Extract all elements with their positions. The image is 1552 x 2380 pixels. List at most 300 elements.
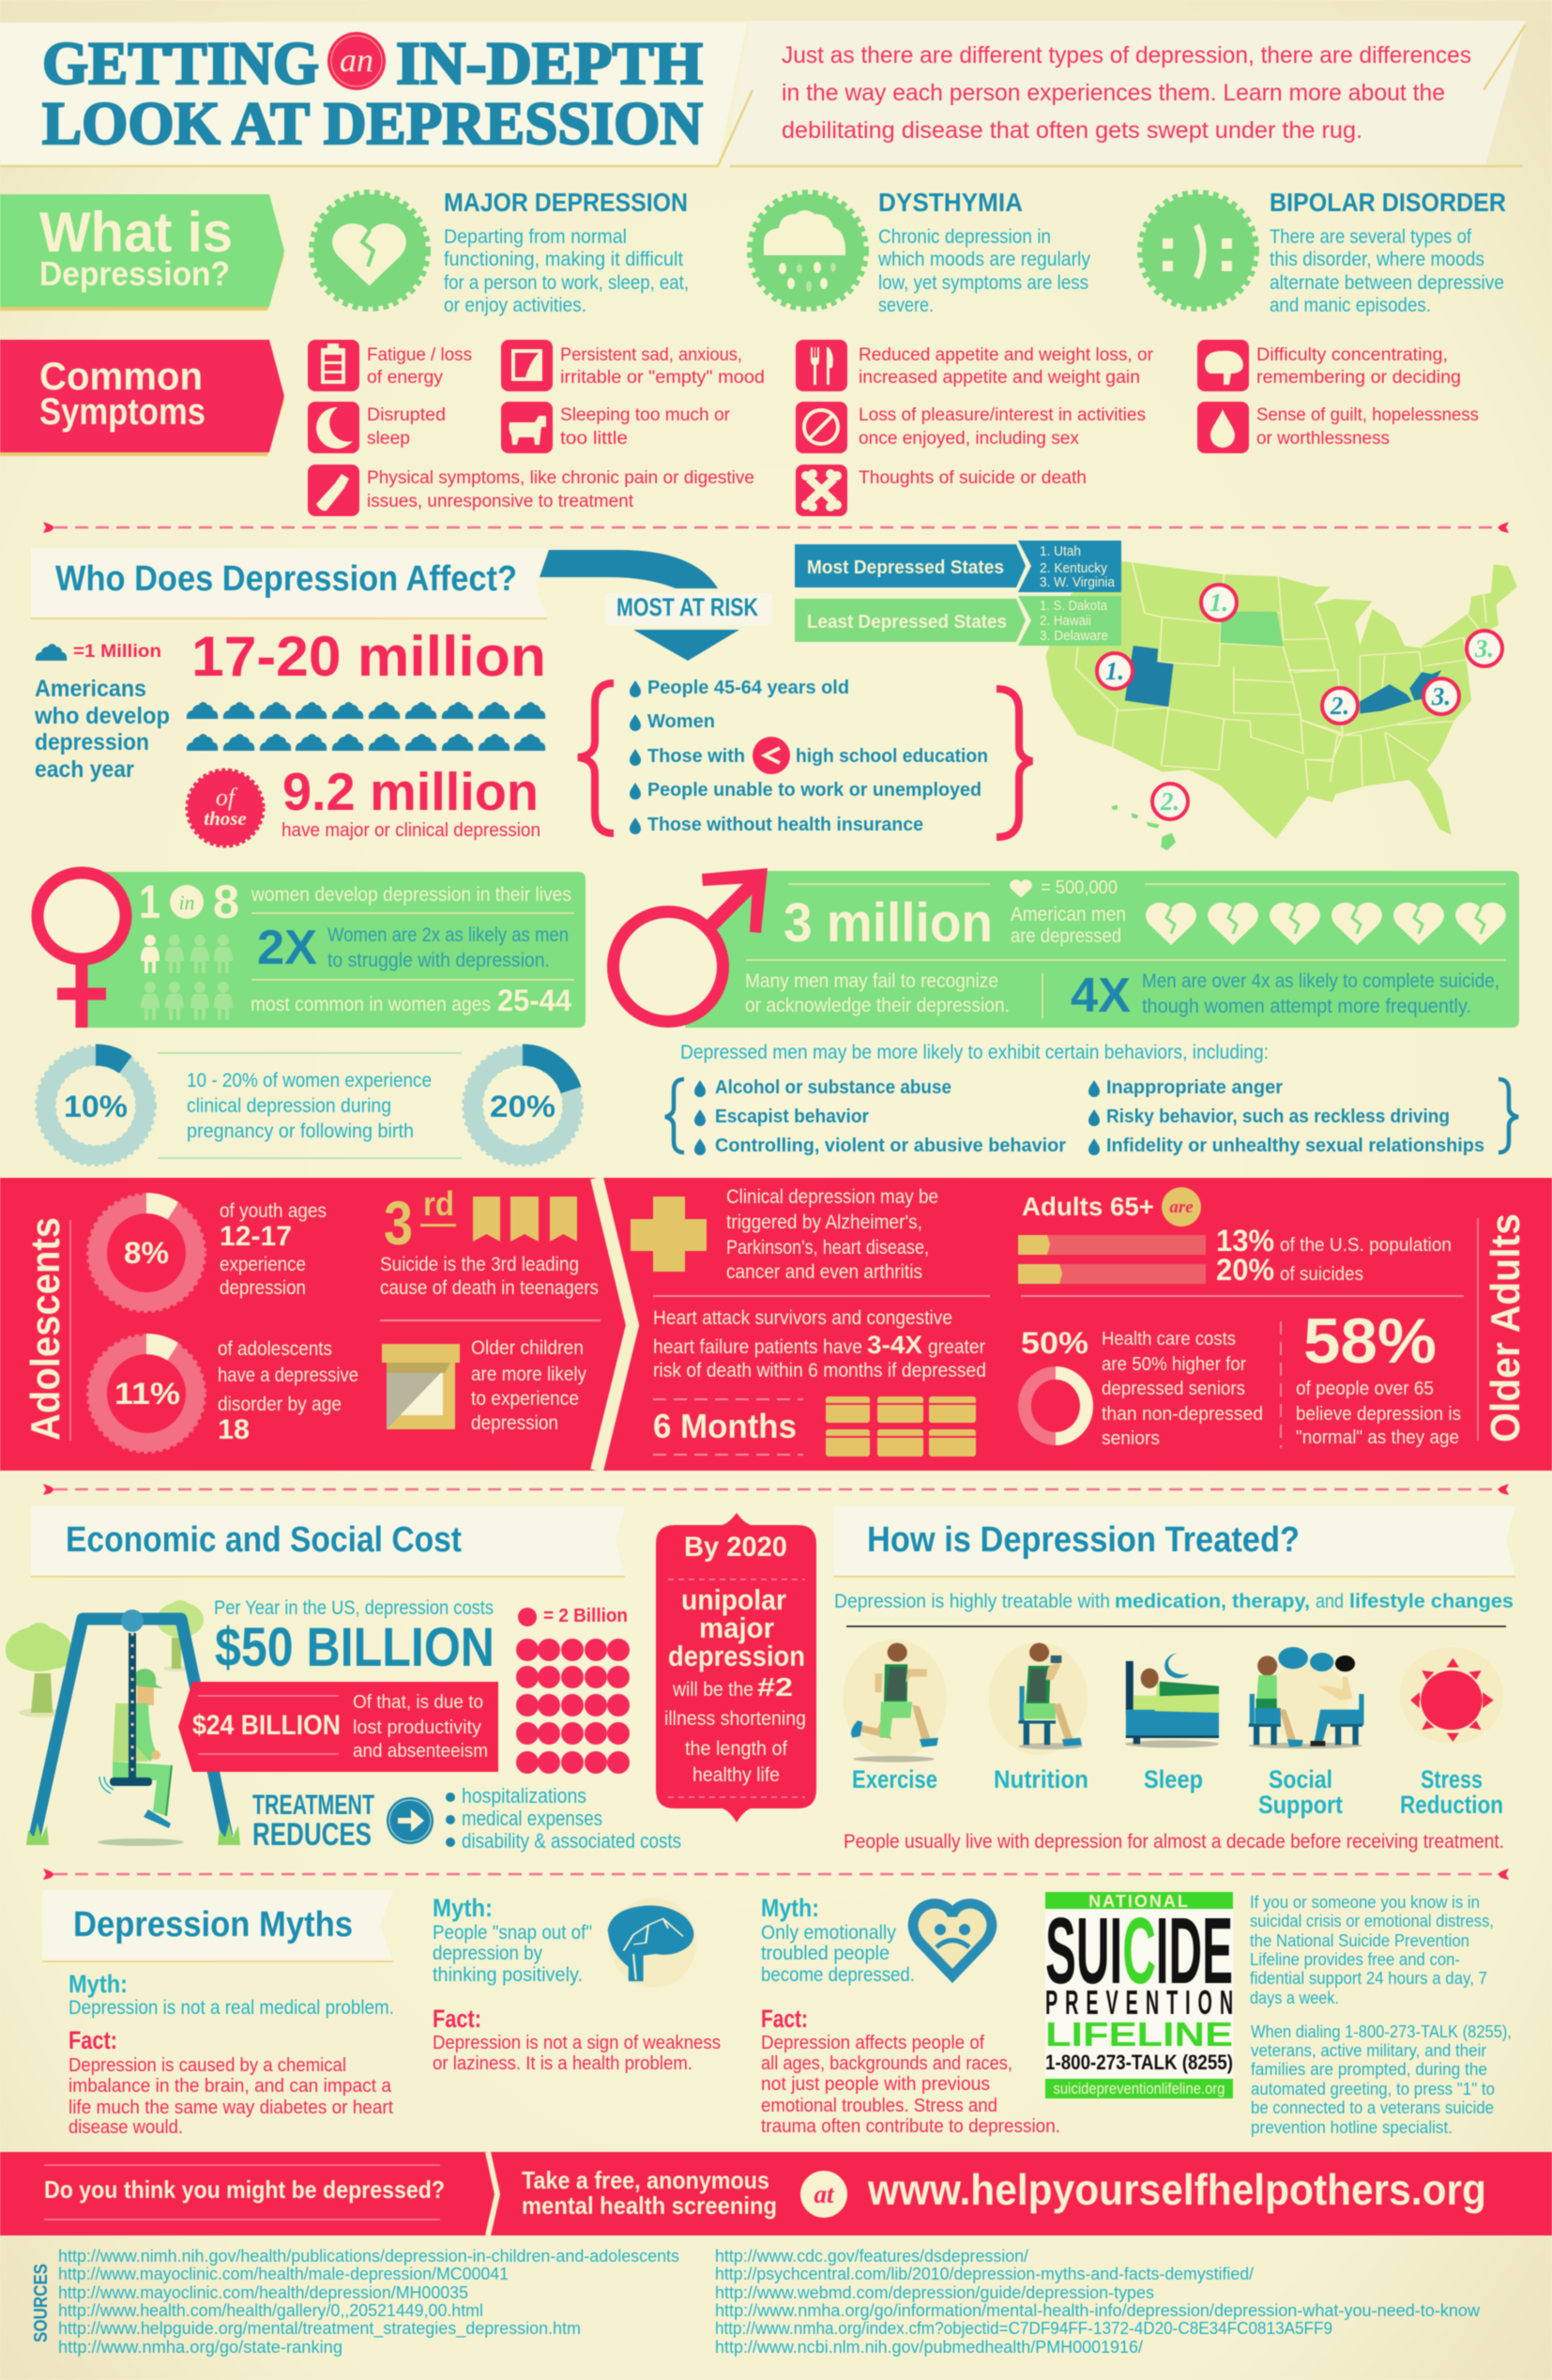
myth three (761, 1894, 1060, 2137)
intro text (782, 42, 1471, 144)
americans label: Americans (35, 676, 146, 702)
text: clinical triggers: Clinical depression may be (726, 1186, 938, 1208)
lifeline text: be connected to a veterans suicide (1251, 2098, 1494, 2117)
title: IN-DEPTH (396, 30, 703, 98)
map marker: west virginia: 3. (1431, 682, 1451, 710)
screening text: mental health screening (522, 2191, 777, 2220)
treatment labels: Support (1258, 1791, 1343, 1819)
text: suicide 3rd leading: Suicide is the 3rd leading (380, 1254, 579, 1275)
text: youth ages: 12-17 (220, 1221, 292, 1252)
badge: at (800, 2171, 847, 2218)
arrow: most at risk: MOST AT RISK (616, 593, 758, 621)
logo: national suicide prevention lifeline: NATIONAL (1088, 1892, 1190, 1911)
symptom: mood (560, 345, 765, 388)
label: most depressed states: 3. W. Virginia (1040, 574, 1116, 590)
treatment labels: Exercise (852, 1765, 937, 1793)
statistic: 3 million: 3 million (784, 892, 993, 954)
text: men fail to recognize: or acknowledge their depression. (745, 995, 1010, 1016)
title: LOOK AT DEPRESSION (42, 90, 703, 158)
panel: who does depression affect (31, 548, 1032, 847)
list: treatment reduces: medical expenses (462, 1807, 602, 1830)
behaviours list: Infidelity or unhealthy sexual relationships (1106, 1136, 1484, 1156)
text: clinical triggers: Parkinson's, heart disease, (726, 1237, 929, 1259)
number: 9.2 million: have major or clinical depression (281, 820, 540, 841)
stat: 58 percent: "normal" as they age (1296, 1427, 1459, 1448)
myth one: life much the same way diabetes or heart (68, 2098, 393, 2118)
text: heart attack survivors: 3-4X (867, 1331, 922, 1359)
statistic: 1 in 8: 1 (139, 876, 160, 928)
panel: how is depression treated (833, 1506, 1515, 1853)
label: most depressed states (795, 541, 1121, 592)
text: heart attack survivors (653, 1307, 986, 1381)
heading: adults 65+ (1022, 1187, 1201, 1227)
symptom: sleeping too much: Sleeping too much or (560, 405, 731, 425)
treatment intro: and (1316, 1591, 1344, 1612)
text: women stats: women develop depression in their lives (251, 884, 571, 906)
text: adolescents disorder: of adolescents (218, 1338, 332, 1360)
illustration: person on swing (6, 1600, 240, 1846)
myth three: not just people with previous (761, 2074, 990, 2095)
stat: 58 percent (1296, 1305, 1461, 1448)
symptom: sleeping too much (560, 405, 731, 449)
sources column two: http://www.nmha.org/go/information/mental-health-info/depression/depression-what-you-need-to-know (715, 2301, 1481, 2320)
symptom: concentration (1256, 345, 1461, 388)
text: youth ages: experience (220, 1254, 306, 1275)
sources column one: http://www.mayoclinic.com/health/male-depression/MC00041 (58, 2265, 509, 2283)
icon: male symbol (614, 868, 768, 1021)
panel: women (38, 872, 586, 1028)
symptom: mood: Persistent sad, anxious, (560, 345, 742, 365)
callout: by 2020: illness shortening (664, 1708, 806, 1730)
text: clinical triggers: cancer and even arthritis (726, 1261, 922, 1283)
legend: heart equals 500,000: are depressed (1011, 925, 1121, 947)
lifeline text: suicidal crisis or emotional distress, (1250, 1912, 1494, 1930)
myth three: Myth: (761, 1894, 819, 1922)
badge: at: at (814, 2180, 835, 2208)
risk list: Women (647, 711, 715, 732)
myth two (433, 1894, 721, 2074)
icon: pill bottle (382, 1344, 460, 1429)
callout: by 2020: depression (668, 1640, 805, 1672)
major depression text: or enjoy activities. (444, 295, 586, 316)
text: pregnancy statistic: pregnancy or following birth (187, 1121, 414, 1142)
icon: exercise (843, 1640, 947, 1762)
banner: common symptoms: Common (39, 354, 203, 398)
major depression text: for a person to work, sleep, eat, (444, 272, 689, 294)
myth two: or laziness. It is a health problem. (433, 2053, 692, 2074)
adolescents label: Adolescents (23, 1217, 68, 1441)
legend: heart equals 500,000: = 500,000 (1041, 877, 1118, 898)
symptom: guilt: Sense of guilt, hopelessness (1256, 405, 1479, 425)
icon: battery (308, 340, 359, 391)
myth two: Depression is not a sign of weakness (433, 2033, 721, 2053)
icon: drop (1197, 402, 1249, 453)
text: health care costs (1102, 1329, 1263, 1449)
call to action band (0, 2152, 1552, 2235)
text: clinical triggers (726, 1186, 938, 1283)
dysthymia text: DYSTHYMIA (878, 188, 1023, 217)
symptom: thoughts of suicide: Thoughts of suicide or death (859, 468, 1087, 488)
treatment labels: Nutrition (994, 1765, 1088, 1793)
screening text: Take a free, anonymous (522, 2166, 769, 2194)
text: women stats: 25-44 (497, 984, 571, 1017)
callout: by 2020: the length of (685, 1738, 787, 1760)
text: $50 billion: $50 BILLION (215, 1617, 495, 1678)
lifeline text: Lifeline provides free and con- (1250, 1950, 1460, 1969)
risk list: People unable to work or unemployed (647, 780, 981, 801)
major depression text: functioning, making it difficult (444, 249, 683, 270)
statistic: 1 in 8: 8 (213, 876, 239, 928)
sources column two: http://psychcentral.com/lib/2010/depression-myths-and-facts-demystified/ (715, 2265, 1254, 2283)
heading ribbon (42, 1890, 393, 1961)
treatment labels: Stress (1421, 1765, 1483, 1793)
text: older children: Older children (471, 1337, 584, 1359)
callout: $24 billion: $24 BILLION (192, 1710, 341, 1741)
label: least depressed states: 2. Hawaii (1040, 613, 1091, 629)
text: heart attack survivors: risk of death within 6 months if depressed (653, 1360, 986, 1381)
label: least depressed states: Least Depressed States (807, 612, 1007, 633)
text: older children: to experience (471, 1388, 579, 1410)
myth two: depression by (433, 1943, 542, 1964)
statistic: 1 in 8: in (178, 891, 195, 914)
myth two: People "snap out of" (433, 1922, 592, 1944)
panel: common symptoms (0, 340, 1479, 516)
heading ribbon (31, 548, 547, 618)
callout: $24 billion: lost productivity (353, 1717, 481, 1738)
header band with title and intro (0, 21, 1526, 166)
banner: what is depression: Depression? (39, 254, 230, 293)
heading: adults 65+: Adults 65+ (1022, 1192, 1154, 1221)
americans label (34, 676, 170, 783)
stat: 58 percent: of people over 65 (1296, 1379, 1434, 1399)
myth three: Depression affects people of (761, 2033, 984, 2053)
legend: cloud equals one million: =1 Million (73, 642, 161, 662)
callout: by 2020: #2 (757, 1672, 793, 1701)
pictogram: dollar dots (516, 1639, 630, 1774)
legend: heart equals 500,000: American men (1011, 904, 1126, 925)
icon: stress reduction sun (1400, 1647, 1503, 1744)
symptom: concentration: remembering or deciding (1256, 368, 1461, 388)
statistic: 4x (1071, 969, 1499, 1023)
label: most depressed states: Most Depressed States (807, 557, 1004, 578)
panel: men (614, 868, 1519, 1028)
screening text (522, 2166, 777, 2220)
behaviours list: Escapist behavior (715, 1106, 869, 1127)
logo: national suicide prevention lifeline: suicidepreventionlifeline.org (1053, 2080, 1225, 2098)
brace right (997, 689, 1032, 837)
symptom: loss of pleasure (859, 405, 1146, 449)
icon: picture frame (501, 340, 553, 391)
stat: 3rd: rd (423, 1184, 454, 1223)
icon: brain (608, 1898, 697, 1988)
symptom: appetite: Reduced appetite and weight loss, or (859, 345, 1154, 365)
older adults label: Older Adults (1483, 1213, 1529, 1442)
myth one: Depression is not a real medical problem. (68, 1997, 394, 2019)
text: health care costs: Health care costs (1102, 1329, 1236, 1350)
text: pregnancy statistic: clinical depression during (187, 1095, 391, 1117)
logo: national suicide prevention lifeline: PREVENTION (1045, 1985, 1233, 2022)
text: adolescents disorder: disorder by age (218, 1394, 342, 1415)
icon: bookmarks (473, 1197, 577, 1242)
brace left teal (665, 1079, 684, 1152)
sources column one: http://www.nmha.org/go/state-ranking (58, 2338, 342, 2357)
myth three: emotional troubles. Stress and (761, 2096, 997, 2116)
behaviours list (694, 1077, 1484, 1156)
text: youth ages (220, 1200, 327, 1299)
text: men fail to recognize (745, 970, 1010, 1016)
icon: arrow circle (387, 1797, 434, 1844)
lifeline text: the National Suicide Prevention (1250, 1931, 1469, 1950)
americans label: each year (35, 756, 134, 783)
statistic: 1 in 8 (139, 876, 239, 928)
sources column two: http://www.cdc.gov/features/dsdepression/ (715, 2247, 1028, 2266)
text: suicide 3rd leading (380, 1254, 599, 1299)
stat: 58 percent: 58% (1303, 1305, 1437, 1377)
ring: 20 percent: 20% (490, 1090, 555, 1123)
legend: cloud equals one million (36, 642, 161, 662)
text: women stats: to struggle with depression. (327, 950, 550, 971)
symptom: concentration: Difficulty concentrating, (1256, 345, 1448, 365)
panel: what is depression (0, 188, 1506, 316)
statistic: 4x: though women attempt more frequently. (1142, 996, 1471, 1017)
banner: common symptoms: Symptoms (39, 391, 205, 433)
symptom: guilt (1256, 405, 1479, 449)
bar chart: adults 65+: of suicides (1280, 1264, 1363, 1285)
panel: adolescents and older adults band (0, 1178, 1552, 1471)
symptom: physical: issues, unresponsive to treatment (367, 492, 634, 511)
logo: national suicide prevention lifeline: 1-800-273-TALK (8255) (1045, 2051, 1233, 2074)
text: women stats (251, 884, 574, 1017)
sources column one: http://www.helpguide.org/mental/treatment_strategies_depression.htm (58, 2319, 581, 2339)
lifeline text: fidential support 24 hours a day, 7 (1250, 1969, 1487, 1988)
symptom: physical: Physical symptoms, like chronic pain or digestive (367, 468, 754, 488)
symptom: guilt: or worthlessness (1256, 429, 1390, 449)
myth two: thinking positively. (433, 1964, 583, 1986)
callout: $24 billion: Of that, is due to (353, 1692, 483, 1713)
text: youth ages: depression (220, 1277, 306, 1299)
text: heart attack survivors: greater (928, 1336, 985, 1358)
ring: 8 percent (88, 1195, 205, 1311)
major depression text: Departing from normal (444, 226, 627, 248)
heading ribbon (833, 1506, 1515, 1577)
map marker: delaware (1467, 631, 1502, 666)
sources column two: http://www.ncbi.nlm.nih.gov/pubmedhealth/PMH0001916/ (715, 2338, 1143, 2357)
text: $50 billion (214, 1597, 495, 1678)
dysthymia text: Chronic depression in (878, 226, 1051, 248)
bipolar disorder text: this disorder, where moods (1270, 249, 1484, 270)
pictogram: women (141, 935, 233, 1020)
risk list: People 45-64 years old (647, 678, 849, 698)
label: least depressed states: 1. S. Dakota (1040, 598, 1108, 614)
risk list: Those without health insurance (647, 815, 923, 835)
text: adolescents disorder: have a depressive (218, 1365, 358, 1386)
legend: heart equals 500,000 (1010, 877, 1126, 947)
symptom: mood: irritable or "empty" mood (560, 368, 765, 388)
ring: 20 percent (464, 1046, 582, 1165)
myth three: troubled people (761, 1943, 890, 1964)
callout: by 2020: By 2020 (684, 1532, 787, 1563)
dysthymia text: low, yet symptoms are less (878, 272, 1088, 294)
callout: by 2020 (656, 1513, 816, 1823)
map of the united states (1045, 561, 1517, 850)
behaviours list: Risky behavior, such as reckless driving (1106, 1106, 1450, 1127)
text: health care costs: than non-depressed (1102, 1404, 1263, 1425)
lifeline text: When dialing 1-800-273-TALK (8255), (1251, 2022, 1512, 2041)
text: treatment reduces: TREATMENT (252, 1790, 374, 1821)
major depression text: MAJOR DEPRESSION (444, 188, 688, 217)
text: health care costs: depressed seniors (1102, 1379, 1245, 1399)
dysthymia text (877, 188, 1090, 316)
stat: 3rd (384, 1184, 456, 1258)
bar chart: adults 65+ (1018, 1224, 1452, 1287)
text: women stats: Women are 2x as likely as men (327, 924, 569, 946)
heading ribbon: Who Does Depression Affect? (55, 559, 517, 599)
banner: what is depression: What is (39, 201, 233, 264)
panel: sources (31, 2247, 1481, 2357)
myth one: disease would. (68, 2117, 183, 2138)
bipolar disorder text: There are several types of (1270, 226, 1471, 248)
lifeline text (1250, 1893, 1512, 2137)
ring: 11 percent (88, 1335, 205, 1452)
title: GETTING (42, 30, 319, 98)
logo: national suicide prevention lifeline: SUICIDE (1045, 1899, 1233, 2004)
sources column one: http://www.health.com/health/gallery/0,,20521449,00.html (58, 2301, 483, 2320)
number: 9.2 million: 9.2 million (282, 762, 539, 822)
text: clinical triggers: triggered by Alzheimer's, (726, 1212, 922, 1233)
text: treatment reduces: REDUCES (252, 1817, 372, 1853)
behaviours list: Inappropriate anger (1106, 1077, 1283, 1098)
treatment labels: Reduction (1400, 1791, 1503, 1819)
callout: by 2020: major (699, 1611, 774, 1644)
badge: of those (187, 770, 264, 847)
heading ribbon: Depression Myths (73, 1905, 353, 1945)
brace right teal (1499, 1079, 1518, 1152)
myth one: Fact: (68, 2026, 117, 2054)
label: most depressed states: 2. Kentucky (1040, 560, 1107, 576)
map marker: hawaii: 2. (1160, 787, 1179, 816)
title badge: an (327, 32, 386, 90)
lifeline text: families are prompted, during the (1251, 2060, 1487, 2079)
panel: depression myths (42, 1890, 1060, 2138)
text: pregnancy statistic: 10 - 20% of women experience (187, 1070, 432, 1091)
text: treatment reduces (252, 1790, 374, 1853)
ring: 8 percent: 8% (124, 1236, 169, 1270)
banner: common symptoms (0, 340, 284, 456)
text: women stats: most common in women ages (251, 994, 491, 1015)
treatment note: People usually live with depression for almost a decade before receiving treatment. (844, 1831, 1504, 1853)
text: men fail to recognize: Many men may fail to recognize (745, 970, 998, 992)
banner: what is depression (0, 194, 284, 311)
donut chart: 50 percent: 50% (1021, 1326, 1088, 1360)
icon: social support (1249, 1647, 1364, 1748)
callout: by 2020: healthy life (692, 1764, 780, 1786)
text: older children: depression (471, 1412, 558, 1434)
heading ribbon: Economic and Social Cost (66, 1520, 462, 1560)
list: treatment reduces (446, 1784, 681, 1853)
myth two: Fact: (433, 2005, 481, 2033)
icon: crossbones (796, 465, 847, 516)
icon: sheep (501, 402, 553, 453)
lifeline text: automated greeting, to press "1" to (1251, 2080, 1495, 2098)
symptom: appetite: increased appetite and weight gain (859, 368, 1140, 388)
badge: of those: of (216, 784, 238, 811)
risk list (630, 678, 988, 835)
text: $50 billion: Per Year in the US, depression costs (214, 1597, 494, 1619)
ring: 11 percent: 11% (114, 1377, 180, 1411)
myth three: Only emotionally (761, 1922, 896, 1944)
label: most depressed states: 1. Utah (1040, 543, 1081, 559)
map marker: south dakota: 1. (1210, 588, 1228, 617)
title badge: an: an (340, 41, 373, 79)
icon: sleep (1125, 1654, 1219, 1747)
sources column two: http://www.webmd.com/depression/guide/depression-types (715, 2283, 1154, 2302)
text: youth ages: of youth ages (220, 1200, 327, 1222)
treatment labels: Social (1269, 1765, 1332, 1793)
icon: medical cross (631, 1197, 707, 1272)
map marker: hawaii (1152, 784, 1188, 819)
americans label: who develop (34, 703, 170, 729)
treatment labels: Sleep (1144, 1765, 1203, 1793)
map marker: kentucky: 2. (1330, 692, 1349, 720)
myth two: Myth: (433, 1894, 493, 1922)
bar chart: adults 65+: 20% (1216, 1253, 1274, 1287)
intro text: debilitating disease that often gets swept under the rug. (782, 117, 1362, 144)
treatment intro: lifestyle changes (1349, 1591, 1514, 1612)
text: heart attack survivors: heart failure patients have (653, 1336, 862, 1358)
icon: fork and knife (796, 340, 847, 391)
map marker: delaware: 3. (1474, 634, 1494, 663)
myth three: trauma often contribute to depression. (761, 2116, 1060, 2137)
ring: 10 percent (37, 1046, 155, 1165)
panel: pregnancy rings (37, 1046, 582, 1165)
lifeline text: prevention hotline specialist. (1251, 2118, 1453, 2137)
map marker: kentucky (1322, 688, 1358, 724)
risk list: Those with (647, 746, 745, 767)
americans label: depression (35, 729, 149, 755)
text: older children (471, 1337, 586, 1434)
symptom: sleep: sleep (367, 429, 410, 449)
symptom: sleep (367, 405, 446, 449)
heading ribbon (31, 1506, 625, 1577)
brace left (578, 683, 614, 833)
text: health care costs: are 50% higher for (1102, 1354, 1246, 1375)
map marker: utah (1097, 653, 1133, 689)
treatment intro: therapy, (1232, 1591, 1310, 1612)
text: suicide 3rd leading: cause of death in teenagers (380, 1277, 599, 1299)
behaviours list: Controlling, violent or abusive behavior (715, 1136, 1066, 1156)
callout: by 2020: unipolar (681, 1583, 786, 1616)
myth three: Fact: (761, 2005, 808, 2033)
myth one (68, 1970, 394, 2138)
sources column one: http://www.nimh.nih.gov/health/publications/depression-in-children-and-adolescents (58, 2247, 679, 2266)
badge: of those: those (204, 807, 247, 830)
legend: dot equals 2 billion: = 2 Billion (543, 1606, 628, 1626)
myth one: imbalance in the brain, and can impact a (68, 2076, 392, 2097)
website: www.helpyourselfhelpothers.org (867, 2165, 1486, 2214)
myth three: become depressed. (761, 1964, 915, 1986)
question text: Do you think you might be depressed? (44, 2175, 445, 2204)
symptom: fatigue (367, 345, 472, 388)
symptom: fatigue: of energy (367, 368, 443, 388)
label: least depressed states (795, 596, 1121, 646)
text: adolescents disorder: 18 (218, 1414, 250, 1445)
treatment labels (852, 1765, 1503, 1819)
map marker: west virginia (1423, 679, 1459, 714)
icon: medicine bottle (308, 465, 359, 516)
pictogram: clouds (187, 702, 545, 751)
map marker: south dakota (1201, 585, 1237, 620)
lifeline text: veterans, active military, and their (1251, 2041, 1486, 2060)
